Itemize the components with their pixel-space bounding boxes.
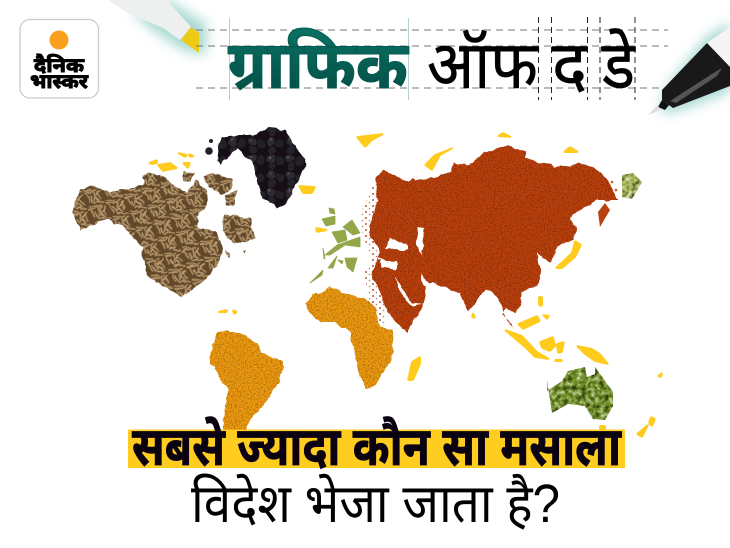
title: ग्राफिक [228,27,409,103]
title guide lines [196,17,668,100]
Australia: green herb [547,367,613,420]
icon: logo sun [50,30,68,50]
title [228,27,636,103]
logo wordmark: भास्कर [30,71,89,93]
banner highlight [128,430,625,468]
Japan / Kamchatka [598,203,610,227]
banner text: सबसे ज्यादा कौन सा मसाला [132,416,622,477]
Greenland: black pepper [205,128,307,208]
logo wordmark [30,53,89,93]
title: ऑफ [427,28,539,103]
title: द [552,28,588,103]
question banner [128,416,625,477]
yellow islands [149,133,662,437]
Africa: turmeric [306,287,393,389]
title: डे [601,27,636,103]
far east: cardamom [622,173,642,199]
world map made of spices [73,128,662,437]
North America: cumin [73,172,255,297]
question second line: विदेश भेजा जाता है? [191,472,560,534]
scattered chilli grains [360,175,386,330]
logo: Dainik Bhaskar [20,20,98,98]
right black marker [648,22,730,115]
Eurasia: red chilli powder [360,146,618,332]
left highlighter marker [108,0,207,54]
logo wordmark: दैनिक [34,53,84,77]
South America: turmeric [210,332,285,432]
Europe side: green cardamom leaves [310,208,360,283]
